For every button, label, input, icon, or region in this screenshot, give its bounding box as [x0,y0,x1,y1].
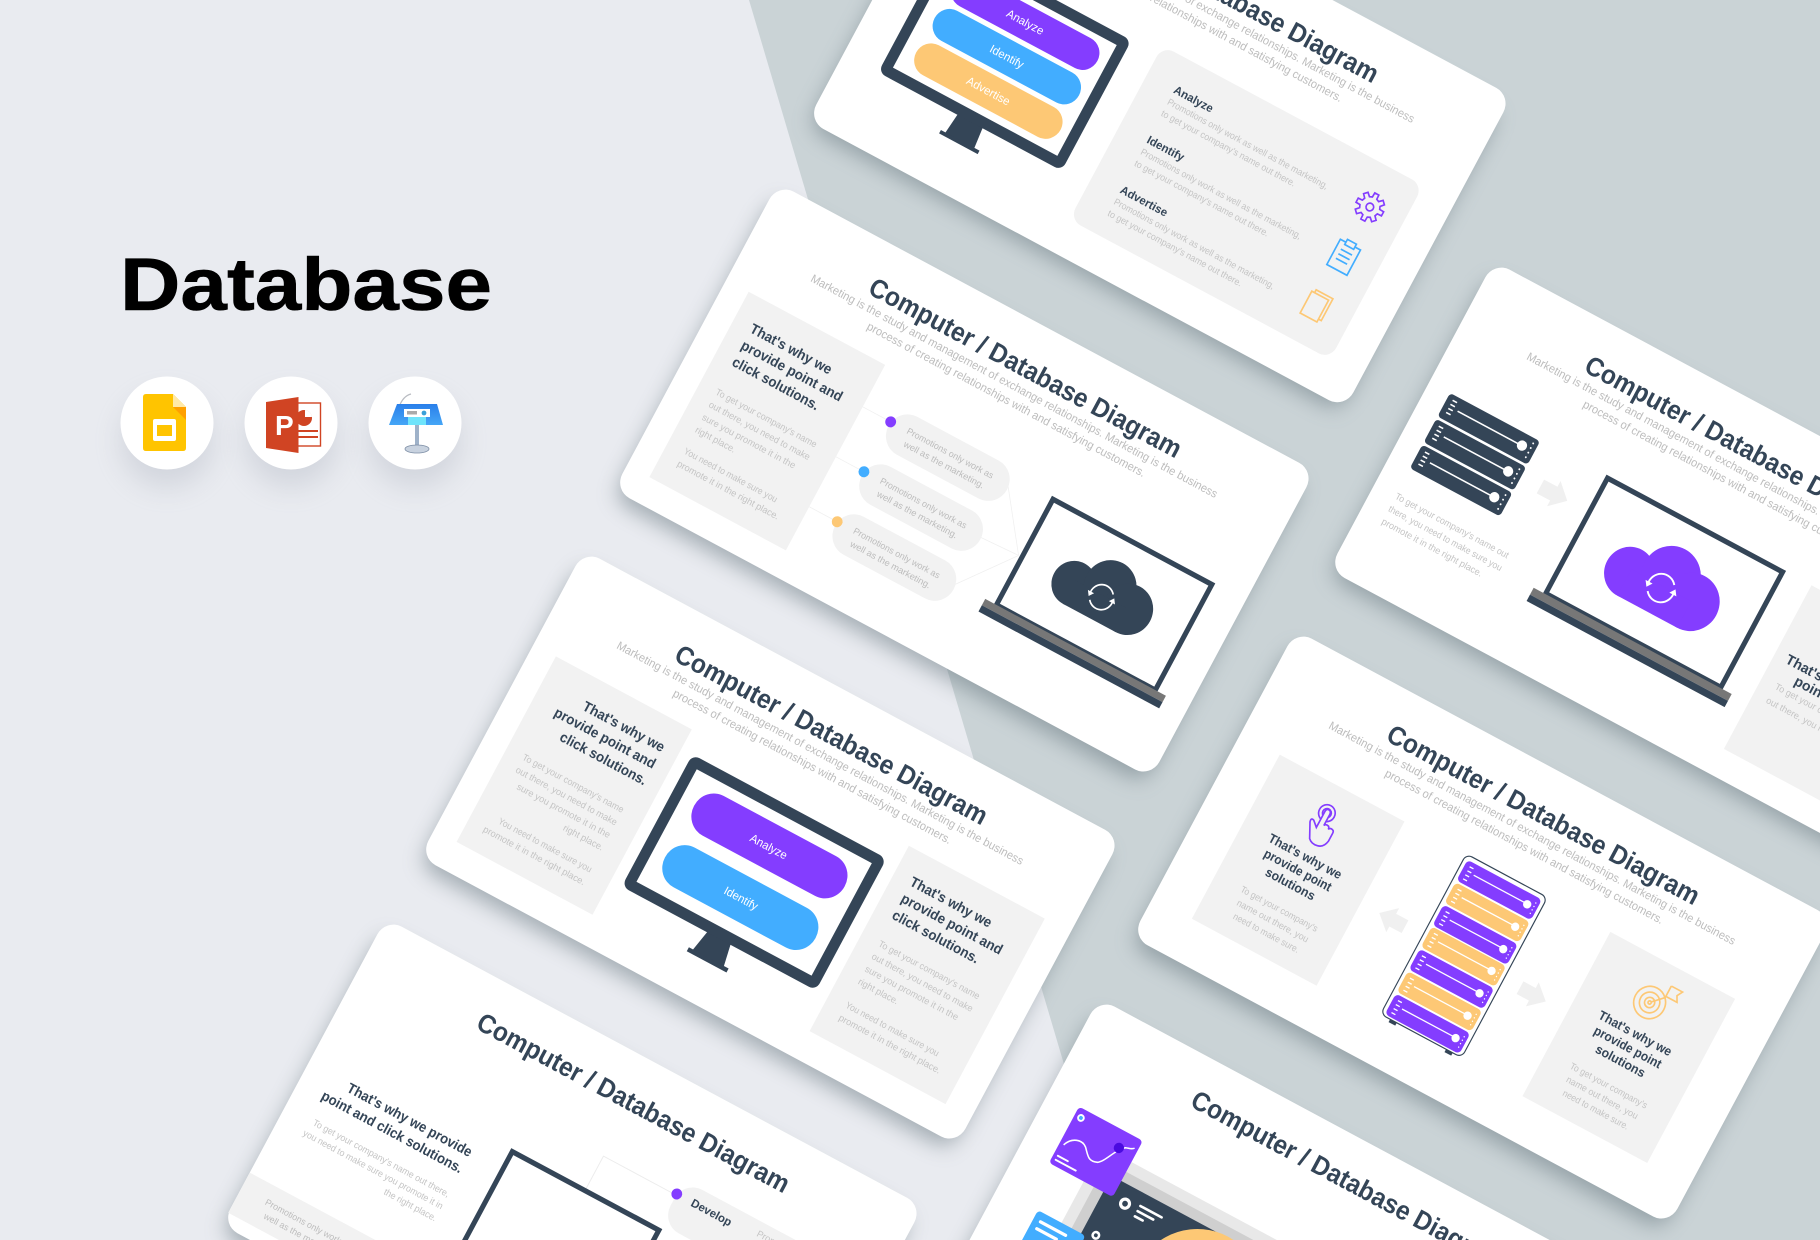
arrow left [1373,901,1411,939]
body text: you need to make sure you promote it in [301,1128,445,1211]
slide card: monitor with three layers [805,0,1512,414]
left panel: out there, you need to make [707,399,812,462]
info panel: Promotions only work as well as the marketing, [1166,97,1330,191]
title: Database [120,243,492,326]
right panel: To get your company's [1568,1061,1649,1111]
body text: To get your company's name out there, [311,1118,451,1199]
right panel: That's why we [907,873,995,930]
icon: powerpoint: P [275,410,294,441]
left panel: out there, you need to make [514,765,619,827]
left panel: You need to make sure you [682,446,779,504]
left panel [649,292,885,550]
right panel: name out there, you [1565,1074,1640,1121]
left panel: To get your company's [1239,884,1320,934]
slide title: Computer / Database Diagram [1382,719,1705,911]
info panel: Advertise [1118,184,1170,220]
right panel [810,846,1045,1104]
left panel: sure you promote it in the [515,782,612,840]
icon: tap hand [1301,800,1344,850]
icon: clipboard [1327,236,1362,275]
slide card: server to purple cloud laptop [1325,261,1820,864]
info panel [1069,46,1423,359]
server caption: To get your company's name out [1393,491,1511,561]
icon: server stack [1410,393,1540,516]
heading: That's why we provide [344,1080,475,1160]
left panel: That's why we [580,698,668,755]
left panel: solutions [1263,864,1318,903]
left panel: click solutions. [557,728,650,788]
monitor: Advertise [964,75,1012,108]
pill three: Promotions only work as [852,526,942,581]
right panel: click solutions. [890,907,982,966]
body text: the right place. [382,1187,438,1223]
info panel: Analyze [1171,84,1216,116]
right panel: solutions [1593,1041,1648,1080]
pill one: well as the marketing. [901,438,986,490]
icon: purple sync cloud [1595,519,1737,641]
icon: target flag [1628,973,1683,1028]
left panel: need to make sure. [1231,911,1301,955]
info panel: Promotions only work as well as the marketing, [1139,147,1303,241]
right panel: To get your company's name [877,939,982,1001]
monitor: Analyze [1004,8,1046,38]
left panel: provide point and [552,704,659,772]
slide card: laptop with develop pill [217,918,923,1240]
monitor: Identify [987,43,1026,72]
right panel: provide point and [898,890,1006,958]
arrow right [1514,976,1552,1014]
slide card: dashboard monitor [930,998,1636,1240]
left panel: sure you promote it in the [700,412,797,471]
develop pill [656,1178,852,1240]
chart card purple [1049,1107,1143,1197]
pill three: well as the marketing. [848,538,933,590]
bottom strip [228,1173,418,1240]
left panel: provide point [1261,846,1335,895]
icon: gear [1350,187,1390,227]
pill two: well as the marketing. [874,488,959,540]
slide title: Computer / Database Diagram [864,272,1187,464]
left panel: To get your company's name [521,752,626,815]
left panel: click solutions. [730,353,822,413]
subtitle: Marketing is the study and management of exchange relationships. Marketing is the business [614,640,1025,868]
right panel: You need to make sure you [844,1000,941,1058]
left panel: provide point and [738,337,846,404]
slide card: server rack [1127,630,1820,1233]
blue card [1010,1210,1086,1240]
monitor: Identify [722,885,760,913]
arrow [1534,474,1574,513]
info panel: to get your company's name out there. [1133,158,1271,239]
server rack [1379,854,1547,1060]
left panel: right place. [561,823,605,853]
slide card: monitor with two layers [415,550,1121,1153]
right panel [1522,932,1735,1163]
right panel: promote it in the right place. [837,1013,942,1076]
right panel: provide point [1591,1023,1665,1072]
laptop [455,1152,659,1240]
pill three [820,504,964,608]
subtitle: Marketing is the study and management of exchange relationships. Marketing is the business [1326,720,1737,948]
right panel: right place. [856,976,900,1006]
monitor [614,762,879,1011]
slide card: cloud laptop with pills [609,183,1315,786]
pill two [847,454,991,558]
info panel: to get your company's name out there. [1159,108,1297,189]
server caption: there, you need to make sure you [1387,504,1504,573]
monitor [871,0,1124,190]
monitor: Analyze [748,832,789,862]
icon: dark sync cloud [1043,537,1168,644]
left panel: To get your company's name [714,387,819,449]
slide title: Computer / Database Diagram [670,639,993,831]
right panel: need to make sure. [1561,1088,1631,1132]
subtitle: process of creating relationships with and satisfying customers. [1383,768,1665,927]
info panel: Promotions only work as well as the marketing, [1112,197,1276,291]
server caption: promote it in the right place. [1380,516,1484,579]
pill one: Promotions only work as [905,426,996,481]
left panel: right place. [694,425,737,455]
info panel: to get your company's name out there. [1106,208,1244,288]
background: slate wedge [749,0,1820,1240]
icon: powerpoint [244,376,338,487]
left panel [457,656,692,915]
left panel: That's why we [747,320,835,377]
pill one [874,404,1017,508]
info panel: Identify [1145,134,1187,165]
right panel: out there, you need to make [870,951,975,1014]
left panel: That's why we [1266,830,1345,882]
pill two: Promotions only work as [878,476,969,531]
connector line [586,1156,676,1228]
subtitle: process of creating relationships with and satisfying customers. [671,688,953,847]
slide title: Computer / Database Diagram [472,1007,795,1199]
left panel: You need to make sure you [497,816,594,874]
subtitle: process of creating relationships with and satisfying customers. [865,321,1147,480]
dashboard monitor [1001,1146,1449,1240]
right panel: sure you promote it in the [863,964,960,1022]
left panel: name out there, you [1235,898,1310,944]
laptop [1527,472,1794,707]
left panel [1192,755,1404,986]
right panel: That's why we [1596,1007,1675,1059]
right panel [1724,585,1820,823]
laptop [978,493,1222,708]
left panel: promote it in the right place. [481,824,587,887]
icon: google slides [120,376,214,487]
heading: point and click solutions. [319,1087,466,1176]
develop pill: Develop [689,1197,733,1229]
icon: keynote [368,376,462,487]
subtitle: Marketing is the study and management of exchange relationships. Marketing is the business [808,273,1219,501]
left panel: promote it in the right place. [675,459,781,522]
connector lines [809,407,1046,605]
icon: documents [1300,288,1333,324]
